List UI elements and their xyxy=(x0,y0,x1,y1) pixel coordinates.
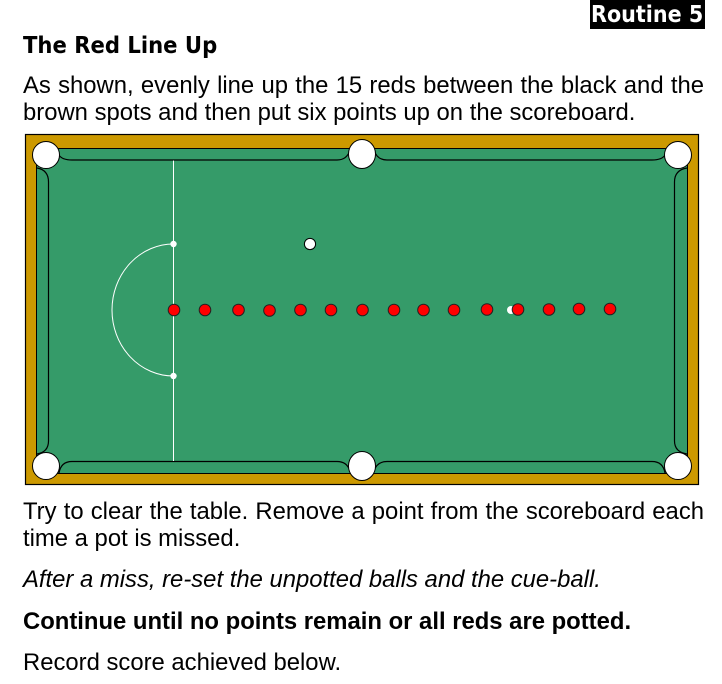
cue ball xyxy=(304,238,316,250)
instruction text xyxy=(23,498,704,552)
intro text: brown spots and then put six points up on the scoreboard. xyxy=(23,99,635,126)
instruction text: time a pot is missed. xyxy=(23,525,240,552)
title: The Red Line Up xyxy=(23,33,217,59)
italic note: After a miss, re-set the unpotted balls and the cue-ball. xyxy=(23,566,601,593)
red balls xyxy=(168,303,616,316)
cloth xyxy=(36,148,688,474)
baulk line and D xyxy=(112,160,174,461)
bold instruction: Continue until no points remain or all reds are potted. xyxy=(23,608,631,635)
intro text xyxy=(23,72,704,126)
instruction text: Try to clear the table. Remove a point from the scoreboard each xyxy=(23,498,704,525)
pockets xyxy=(32,140,692,480)
table frame xyxy=(26,134,698,484)
routine label: Routine 5 xyxy=(591,2,703,28)
spots xyxy=(170,241,515,379)
record line: Record score achieved below. xyxy=(23,649,341,676)
cushions xyxy=(37,150,687,473)
intro text: As shown, evenly line up the 15 reds between the black and the xyxy=(23,72,704,99)
